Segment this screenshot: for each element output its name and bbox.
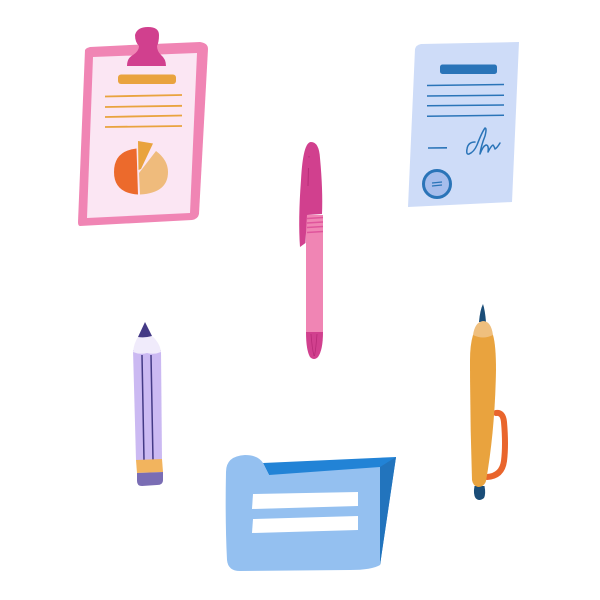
pen nib bbox=[479, 304, 486, 322]
seal bbox=[424, 170, 450, 198]
pencil sharpened wood bbox=[133, 336, 161, 354]
pen end bbox=[474, 486, 485, 500]
pie chart bbox=[114, 141, 168, 194]
icon: clipboard with report bbox=[78, 27, 208, 226]
pencil body bbox=[133, 350, 162, 460]
cap highlight bbox=[308, 156, 309, 186]
pen barrel bbox=[470, 335, 496, 487]
pen grip rings bbox=[307, 218, 323, 232]
pencil eraser bbox=[137, 472, 163, 486]
date dash bbox=[428, 147, 447, 149]
pencil ferrule bbox=[136, 459, 163, 473]
clipboard board bbox=[78, 42, 208, 226]
pen cap bbox=[299, 142, 322, 247]
folder label bar one bbox=[252, 492, 358, 509]
pencil stripes bbox=[142, 355, 153, 460]
folder label bar two bbox=[252, 516, 358, 533]
pen top collar bbox=[473, 321, 493, 338]
clip bbox=[127, 27, 166, 66]
clipboard paper bbox=[87, 53, 197, 218]
pen tip bbox=[306, 332, 323, 359]
document sheet bbox=[408, 42, 519, 207]
folder back bbox=[263, 457, 396, 565]
report title bar bbox=[118, 74, 176, 84]
document text lines bbox=[427, 84, 504, 116]
pen body bbox=[306, 215, 323, 332]
icon: orange pen bbox=[470, 304, 505, 500]
folder front bbox=[226, 455, 380, 571]
report text lines bbox=[105, 95, 182, 127]
document title bar bbox=[440, 64, 497, 74]
pen clip bbox=[487, 413, 505, 477]
pencil lead bbox=[138, 322, 152, 337]
signature bbox=[467, 128, 500, 154]
icon: pink pen bbox=[299, 142, 323, 359]
icon: signed document bbox=[408, 42, 519, 207]
icon: purple pencil bbox=[133, 322, 163, 486]
icon: blue folder bbox=[226, 455, 396, 571]
